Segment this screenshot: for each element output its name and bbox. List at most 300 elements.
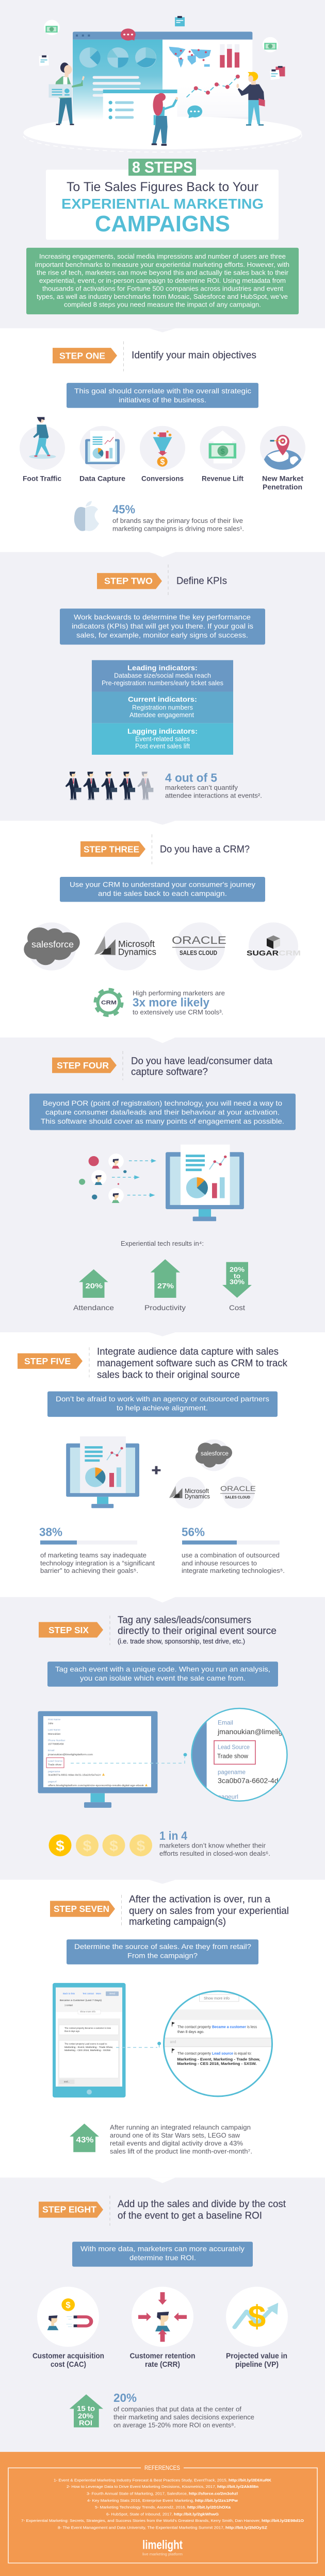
section background: step four <box>0 1038 325 1332</box>
step two header: STEP TWO <box>104 576 153 586</box>
magnifier: query detail: The contact property <box>177 2024 211 2029</box>
lead form text: Email <box>48 1749 54 1752</box>
step eight header: STEP EIGHT <box>42 2205 96 2215</box>
panel: lagging indicators <box>92 723 233 755</box>
front list window <box>103 90 177 128</box>
arrow: cost down 20 to 30%: 20% <box>230 1266 245 1273</box>
panel: leading indicators: Pre-registration numbers/early ticket sales <box>102 679 223 687</box>
step five header: sales back to their original source <box>97 1369 240 1380</box>
panel: leading indicators <box>92 660 233 692</box>
man holding id card <box>48 62 85 125</box>
step seven callout <box>67 1939 258 1964</box>
arrow: cost down 20 to 30%: to <box>234 1272 240 1280</box>
step six header: (i.e. trade show, sponsorship, test drive, etc.) <box>118 1637 245 1645</box>
notes right <box>270 66 285 80</box>
step eight header: of the event to get a baseline ROI <box>118 2210 262 2221</box>
magnifier: lead source detail: Trade show <box>217 1753 248 1760</box>
tablet text: Marketing - CES 2018, Marketing - SXSW. <box>64 2049 111 2052</box>
arrow: 15 to 20% roi: 15 to <box>77 2405 95 2412</box>
connector: form to magnifier <box>71 1753 187 1763</box>
monitor <box>66 1436 139 1508</box>
small logo labels: ORACLE <box>220 1485 256 1493</box>
arrow: attendance up 20% <box>73 1269 114 1312</box>
stat: lego case study: After running an integrated relaunch campaign <box>110 2124 251 2131</box>
reference list: 4- Key Marketing Stats 2016, Enterprise Event Marketing, <box>87 2498 194 2503</box>
tablet text: 1 contact <box>64 2004 73 2007</box>
tablet with query screen <box>53 1983 126 2097</box>
mini bar chart <box>220 44 239 67</box>
lead form text: Manoukian <box>48 1733 61 1736</box>
small salesforce cloud <box>196 1443 232 1467</box>
roi metric labels: cost (CAC) <box>51 2361 86 2369</box>
logo: sugarcrm <box>247 922 301 971</box>
tablet text: Test contact <box>83 1992 94 1995</box>
coins: 1 in 4: $ <box>137 1838 145 1854</box>
tablet text: More <box>96 1992 102 1995</box>
roi metric icons <box>47 2292 278 2342</box>
objective labels <box>23 475 303 491</box>
step eight callout: determine true ROI. <box>129 2254 196 2262</box>
stat: 3x more likely: High performing marketers are <box>133 989 225 997</box>
step one callout <box>67 383 258 408</box>
magnifier: lead source detail: Email <box>218 1719 233 1726</box>
small logo labels: salesforce <box>201 1450 229 1457</box>
tablet text: Send <box>109 1992 116 1995</box>
arrow: productivity up 27% <box>144 1259 186 1312</box>
step four callout <box>29 1094 296 1130</box>
stat: 3x more likely <box>133 989 225 1016</box>
step three callout <box>60 877 265 902</box>
objective labels: New Market <box>262 475 303 483</box>
stat: 1 in 4: efforts resulted in closed-won deals⁶. <box>159 1850 270 1857</box>
dashed arrows <box>112 1159 156 1197</box>
lead form text: Trade show <box>48 1763 61 1766</box>
magnifier: lead source detail: Lead Source <box>218 1743 250 1751</box>
title line 3: CAMPAIGNS <box>95 211 230 236</box>
section background: step eight <box>0 2178 325 2452</box>
lead form text <box>46 1718 148 1787</box>
tablet text: The contact property Became a customer is less <box>64 2027 111 2029</box>
intro text panel: important benchmarks to measure your experiential marketing efforts. However, with <box>35 261 289 268</box>
step six header: Tag any sales/leads/consumers <box>118 1615 251 1625</box>
stat: 20% <box>113 2392 254 2429</box>
step seven header <box>50 1894 289 1927</box>
magnifier: query detail: Show more info <box>204 1996 230 2001</box>
arrow: 15 to 20% roi: 20% <box>78 2412 93 2420</box>
stat: 4 out of 5: attendee interactions at events². <box>165 792 262 799</box>
magnifier: query detail: is equal to: <box>234 2051 252 2056</box>
roi metric labels <box>32 2352 287 2369</box>
lead form text: First Name <box>48 1718 61 1721</box>
logo: limelight <box>142 2538 183 2556</box>
step seven callout: Determine the source of sales. Are they from retail? <box>74 1943 251 1951</box>
magnifier: query detail: than 8 days ago. <box>177 2029 204 2034</box>
intro text panel: the rise of tech, marketers can move beyond this and actually tie sales back to their <box>37 268 289 276</box>
objective labels: Data Capture <box>79 475 125 483</box>
coins: 1 in 4: $ <box>83 1838 92 1854</box>
icon: crm gear <box>95 989 122 1016</box>
reference list: 1- Event & Experiential Marketing Industry Forecast & Best Practices Study, EventTrack, 2015, <box>54 2478 228 2482</box>
icons for objectives <box>29 417 301 470</box>
woman pointing <box>152 93 178 146</box>
step eight callout <box>72 2242 253 2267</box>
lead form text: pagename <box>48 1771 60 1773</box>
lead form text: jmanoukian@limelightplatform.com <box>47 1753 93 1756</box>
logo: salesforce <box>24 922 80 971</box>
reference list: http://bit.ly/2E98d1O <box>262 2518 304 2523</box>
reference list: 3- Fourth Annual State of Marketing, 2017, Salesforce, <box>87 2492 188 2496</box>
step five header: STEP FIVE <box>24 1356 71 1366</box>
step two callout <box>60 608 265 645</box>
dollar glyph: revenue bill: $ <box>220 448 225 456</box>
stat: 56%: integrate marketing technologies⁵. <box>182 1567 285 1574</box>
small logo labels <box>185 1450 256 1500</box>
icon: five business people <box>66 772 153 800</box>
panel: current indicators: Current indicators: <box>128 696 197 703</box>
objective labels: Revenue Lift <box>202 475 243 483</box>
reference list: http://bit.ly/2zs1PPw <box>195 2498 238 2503</box>
step seven header: query on sales from your experiential <box>129 1905 289 1917</box>
red speech bubble <box>121 28 136 41</box>
reference list: 8- The Event Management and Data University, The Experiential Marketing Summit 2017, <box>58 2526 224 2530</box>
step seven header: STEP SEVEN <box>54 1904 109 1914</box>
title line 1: To Tie Sales Figures Back to Your <box>67 180 258 194</box>
floating clipboard <box>175 16 185 26</box>
monitor <box>166 1145 244 1221</box>
icon: customer retention <box>138 2292 187 2342</box>
icon: apple <box>74 501 99 531</box>
logo: limelight: limelight <box>142 2538 183 2552</box>
stat: 45%: 45% <box>112 503 135 517</box>
step five header: Integrate audience data capture with sales <box>97 1346 279 1358</box>
objective labels: Foot Traffic <box>23 475 61 483</box>
logo: sugarcrm: CRM <box>279 950 301 957</box>
tablet text: Became a Customer (Last 7 Days) <box>60 1999 102 2002</box>
stat: 56% <box>182 1526 285 1574</box>
tablet text: Back to lists <box>63 1992 75 1995</box>
lead form text: Last Name <box>48 1728 60 1732</box>
step four callout: Beyond POR (point of registration) technology, you will need a way to <box>43 1099 282 1107</box>
stat: 20%: their marketing and sales decisions experience <box>113 2413 254 2421</box>
stat: 56%: use a combination of outsourced <box>182 1551 280 1559</box>
logo: microsoft dynamics: Dynamics <box>118 947 156 957</box>
section background: step two <box>0 552 325 821</box>
section background: step one <box>0 328 325 552</box>
roi metric labels: Customer retention <box>130 2352 195 2360</box>
magnifier: query detail: Marketing - CES 2018, Marketing - SXSW. <box>177 2061 256 2066</box>
section background: step three <box>0 821 325 1038</box>
step two header: Define KPIs <box>176 575 227 587</box>
panel: lagging indicators: Post event sales lift <box>135 742 190 750</box>
illustration: people data flowing to dashboard <box>79 1145 244 1221</box>
step six header: STEP SIX <box>48 1625 89 1635</box>
panel: lagging indicators: Lagging indicators: <box>127 727 198 735</box>
magnifier: lead source detail: 3ca0b07a-6602-4dae <box>218 1777 286 1785</box>
step four callout: capture consumer data/leads and their behaviour at your activation. <box>45 1109 280 1116</box>
dollar glyph: conversions coin: $ <box>160 458 165 466</box>
step four callout: This software should cover as many points of engagement as possible. <box>41 1117 284 1125</box>
intro text panel: types, as well as industry benchmarks from Mosaic, Salesforce and HubSpot, we’ve <box>37 293 288 300</box>
coin and value dollar glyphs: $ <box>66 2300 71 2310</box>
coin and value dollar glyphs: $ <box>248 2299 266 2334</box>
logo: oracle sales cloud: SALES CLOUD <box>180 950 217 956</box>
arrow: attendance up 20%: 20% <box>85 1282 103 1290</box>
stat: 38%: of marketing teams say inadequate <box>40 1551 147 1559</box>
title card <box>46 159 279 240</box>
world map <box>169 47 211 67</box>
step two header <box>97 565 227 597</box>
connector: tablet to magnifier <box>116 2042 161 2047</box>
stat: 38%: barrier” to achieving their goals⁵. <box>40 1567 138 1574</box>
stat: 1 in 4 <box>159 1829 270 1857</box>
caption: experiential tech results: Experiential tech results in⁴: <box>121 1240 204 1247</box>
dashboard window <box>73 32 252 120</box>
objective labels: Conversions <box>141 475 184 483</box>
intro text panel: experiential, event, or in-person campaign to determine ROI. Using metadata from <box>39 277 286 284</box>
coins: 1 in 4: $ <box>109 1838 118 1854</box>
step four header <box>52 1051 272 1080</box>
step four header: capture software? <box>131 1066 208 1078</box>
decorative dots <box>79 1156 126 1199</box>
section background: step five <box>0 1332 325 1597</box>
roi metric circles <box>37 2287 288 2347</box>
icon: projected value <box>235 2303 278 2327</box>
icon: new market penetration <box>264 435 301 470</box>
reference list: http://bit.ly/2gkWhwG <box>174 2512 219 2516</box>
step seven callout: From the campaign? <box>127 1952 198 1959</box>
arrow: attendance up 20%: Attendance <box>73 1304 114 1312</box>
coin and value dollar glyphs <box>66 2299 266 2334</box>
step five callout: to help achieve alignment. <box>117 1404 208 1412</box>
lead form text: Julie <box>48 1722 54 1725</box>
arrow: 43% <box>70 2124 99 2152</box>
step one header <box>53 342 256 371</box>
coins: 1 in 4 <box>48 1834 152 1856</box>
step seven header: marketing campaign(s) <box>129 1916 226 1927</box>
footer: references panel <box>0 2452 325 2576</box>
step seven header: After the activation is over, run a <box>129 1894 270 1905</box>
step one header: STEP ONE <box>59 351 105 361</box>
step one header: Identify your main objectives <box>132 350 256 361</box>
logo: microsoft dynamics: Microsoft <box>118 939 155 949</box>
stat: 45% <box>112 503 244 533</box>
magnifier: query detail: Lead source <box>212 2051 234 2056</box>
stat: 1 in 4: 1 in 4 <box>159 1829 188 1843</box>
step one callout: initiatives of the business. <box>119 396 206 404</box>
magnifier: query detail: Became a customer <box>212 2024 246 2029</box>
money bubble right <box>263 37 278 53</box>
arrow: productivity up 27%: Productivity <box>144 1304 186 1312</box>
arrow: 15 to 20% roi <box>70 2394 103 2427</box>
intro text panel: thousands of activations for Fortune 500 companies across industries and event <box>42 285 283 292</box>
reference list: http://bit.ly/2Ak8l8n <box>217 2484 259 2489</box>
stat: 56%: and inhouse resources to <box>182 1560 257 1567</box>
step five callout: Don’t be afraid to work with an agency or outsourced partners <box>56 1395 269 1403</box>
avatar: person one <box>108 1154 124 1168</box>
magnifier: query detail: Marketing - Event, Marketing - Trade Show, <box>177 2057 260 2061</box>
panel: current indicators <box>92 692 233 723</box>
stat: 45%: marketing campaigns is driving more sales¹. <box>112 525 244 533</box>
step four header: STEP FOUR <box>57 1060 109 1071</box>
step eight header: Add up the sales and divide by the cost <box>118 2198 286 2210</box>
icon: conversions funnel <box>153 431 172 467</box>
panel: lagging indicators: Event-related sales <box>135 735 190 743</box>
arrow: 43%: 43% <box>76 2136 93 2145</box>
lead form text: 15778885458 <box>48 1742 64 1745</box>
lead form text: Phone Number <box>48 1739 66 1742</box>
step two callout: Work backwards to determine the key performance <box>74 614 251 621</box>
small logo backgrounds <box>173 1439 254 1509</box>
step three header: Do you have a CRM? <box>160 844 250 855</box>
stat: 38% <box>39 1526 155 1574</box>
step three header: STEP THREE <box>84 844 139 854</box>
step six callout: Tag each event with a unique code. When you run an analysis, <box>55 1666 270 1673</box>
reference list: 2- How to Leverage Data to Drive Event Marketing Decisions, Kissmetrics, 2017, <box>67 2484 216 2489</box>
references heading: REFERENCES <box>144 2464 180 2471</box>
platform ellipse <box>23 116 302 152</box>
stat: 4 out of 5: marketers can’t quantify <box>165 784 238 791</box>
stat: lego case study: sales lift of the product line month-over-month⁷. <box>110 2147 252 2155</box>
stat: 20%: of companies that put data at the center of <box>113 2405 241 2413</box>
stat: 4 out of 5: 4 out of 5 <box>165 772 217 785</box>
logo: oracle sales cloud <box>172 922 226 971</box>
step eight header <box>39 2196 286 2226</box>
tablet text: and... <box>64 2080 70 2083</box>
panel: current indicators: Attendee engagement <box>129 711 194 719</box>
step five callout <box>47 1392 278 1417</box>
tablet text <box>60 1992 116 2083</box>
section background: step seven <box>0 1880 325 2178</box>
small logo labels: SALES CLOUD <box>225 1495 250 1499</box>
icon: revenue lift <box>208 430 236 464</box>
step six header <box>39 1615 277 1645</box>
logo: microsoft dynamics <box>94 922 156 971</box>
step one callout: This goal should correlate with the overall strategic <box>74 387 251 395</box>
step six callout <box>47 1662 278 1687</box>
logo: salesforce: salesforce <box>31 939 74 950</box>
plus sign <box>152 1466 160 1475</box>
step two callout: sales, for example, monitor early signs of success. <box>76 632 248 639</box>
stat: 20%: on average 15-20% more ROI on events⁸. <box>113 2421 236 2429</box>
step six header: directly to their original event source <box>118 1625 277 1637</box>
money bubble left <box>44 20 60 35</box>
hero illustration <box>23 16 302 152</box>
lead form text: Lead Source <box>48 1760 62 1762</box>
tablet text: The contact property Lead source is equal to: <box>64 2042 107 2045</box>
small dynamics icon <box>169 1486 183 1498</box>
step three callout: Use your CRM to understand your consumer's journey <box>70 881 255 888</box>
avatar: person three <box>108 1188 124 1203</box>
step five header <box>18 1346 287 1380</box>
reference list: 6- HubSpot, State of Inbound, 2017, <box>106 2512 173 2516</box>
line chart <box>187 75 240 97</box>
roi metric labels: pipeline (VP) <box>235 2361 279 2369</box>
stat: 38%: 38% <box>39 1526 62 1539</box>
tablet text: Show more info <box>80 2010 96 2013</box>
monitor with lead form <box>38 1711 158 1808</box>
panel: leading indicators: Leading indicators: <box>127 664 198 672</box>
small logo labels: Microsoft <box>185 1487 209 1495</box>
title line 2: EXPERIENTIAL MARKETING <box>61 196 264 212</box>
stat: 1 in 4: marketers don’t know whether their <box>159 1842 266 1850</box>
section background: step six <box>0 1597 325 1880</box>
stat: 4 out of 5 <box>165 772 262 799</box>
stat: 20%: 20% <box>113 2392 137 2405</box>
magnifier: query detail: The contact property <box>177 2051 211 2056</box>
stat: 56%: 56% <box>182 1526 205 1539</box>
reference list: 5- Marketing Technology Trends, Ascend2, 2016, <box>95 2505 186 2510</box>
coins: 1 in 4: $ <box>56 1838 64 1854</box>
reference list: http://bit.ly/2ldOySZ <box>225 2526 268 2530</box>
objectives icon circles <box>20 426 305 470</box>
reference list: http://bit.ly/2D1hOXa <box>187 2505 231 2510</box>
stat: 45%: of brands say the primary focus of their live <box>112 517 243 524</box>
panel: current indicators: Registration numbers <box>132 704 193 711</box>
stat: lego case study: around one of its Star Wars sets, LEGO saw <box>110 2131 240 2139</box>
arrow: cost down 20 to 30%: Cost <box>229 1304 245 1312</box>
step eight callout: With more data, marketers can more accurately <box>80 2245 245 2252</box>
magnifier: query detail <box>164 1991 273 2096</box>
reference list: http://sforce.co/2m3ohzl <box>189 2492 238 2496</box>
step three header <box>80 834 250 865</box>
logo: limelight: live marketing platform <box>142 2552 183 2556</box>
tablet text: Marketing - Event, Marketing - Trade Show, <box>64 2046 113 2048</box>
magnifier: query detail: is less <box>247 2024 257 2029</box>
reference list: 7- Experiential Marketing: Secrets, Strategies, and Success Stories from the World's Greatest Brands, Kerry Smith, Dan Hanover, <box>21 2518 261 2523</box>
intro text panel <box>26 248 299 314</box>
icon: customer acquisition <box>47 2298 91 2330</box>
roi metric labels: Projected value in <box>226 2352 287 2360</box>
arrow: productivity up 27%: 27% <box>157 1282 174 1290</box>
badge: 8 steps: 8 STEPS <box>132 159 193 176</box>
arrow: 15 to 20% roi: ROI <box>79 2419 92 2427</box>
stat: lego case study: retail events and digital activity drove a 43% <box>110 2140 243 2147</box>
magnifier: lead source detail: pageurl <box>218 1793 238 1800</box>
step three callout: and tie sales back to each campaign. <box>98 890 227 897</box>
tablet text: than 8 days ago. <box>64 2030 80 2032</box>
icon: data capture <box>85 431 120 464</box>
reference list <box>21 2478 304 2530</box>
icon: crm gear: CRM <box>101 1000 117 1006</box>
stat: 3x more likely: 3x more likely <box>133 996 210 1009</box>
stat: 38%: technology integration is a “significant <box>40 1560 155 1567</box>
magnifier: lead source detail <box>191 1707 288 1802</box>
step six callout: you can isolate which event the sale came from. <box>80 1674 246 1682</box>
man with folder <box>236 72 265 126</box>
logo: oracle sales cloud: ORACLE <box>172 934 226 946</box>
intro text panel: compiled 8 steps you need measure the impact of any campaign. <box>64 301 261 308</box>
stat: 3x more likely: to extensively use CRM tools³. <box>133 1008 223 1016</box>
arrow: cost down 20 to 30% <box>222 1262 252 1312</box>
step five header: management software such as CRM to track <box>97 1358 287 1369</box>
icon: foot traffic <box>29 417 56 459</box>
note left <box>39 55 49 66</box>
avatar: person two <box>91 1170 107 1185</box>
logo: sugarcrm: SUGAR <box>247 950 279 957</box>
step two callout: indicators (KPIs) that will get you there. If your goal is <box>72 622 253 630</box>
lead form text: 3ca0b07a-6602-4dae-9e31-15a10c5a7a14 <box>48 1774 101 1777</box>
panel: leading indicators: Database size/social media reach <box>114 672 211 679</box>
lead form text: pageurl <box>48 1780 57 1783</box>
arrow: cost down 20 to 30%: 30% <box>230 1278 245 1286</box>
teal speech bubble <box>187 106 202 118</box>
magnifier: lead source detail: pagename <box>218 1769 246 1776</box>
objective labels: Penetration <box>263 483 302 491</box>
step four header: Do you have lead/consumer data <box>131 1056 272 1066</box>
reference list: http://bit.ly/2E6XuRK <box>229 2478 272 2482</box>
section background: header <box>0 0 325 328</box>
roi metric labels: rate (CRR) <box>145 2361 180 2369</box>
